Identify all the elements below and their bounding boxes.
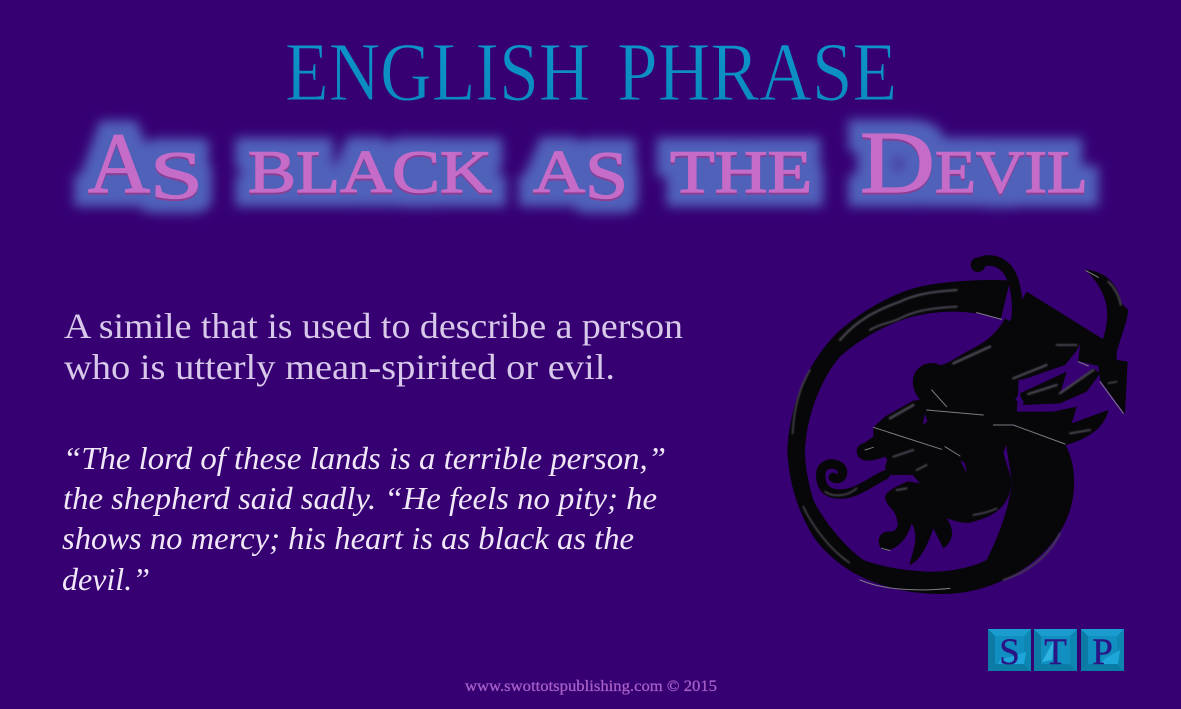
emblem wings: [993, 292, 1108, 445]
emblem highlights: [793, 282, 1121, 580]
title: English Phrase: PHRASE: [617, 26, 897, 119]
emblem whisker curl: [821, 464, 885, 494]
emblem head: [857, 318, 1018, 565]
logo: STP tiles: [988, 629, 1124, 673]
example quote: [62, 440, 666, 597]
heading: As black as the Devil: EVIL: [935, 138, 1088, 205]
emblem sharp edges: [860, 271, 1123, 590]
example quote: “The lord of these lands is a terrible person,”: [63, 440, 666, 476]
emblem ring and crescent: [787, 280, 1074, 594]
heading: As black as the Devil: [88, 113, 1088, 213]
definition text: who is utterly mean-spirited or evil.: [64, 347, 615, 387]
tile P: P: [1092, 632, 1113, 673]
emblem teeth: [885, 467, 912, 475]
heading: As black as the Devil: A: [533, 139, 585, 206]
definition text: [64, 306, 683, 387]
heading: As black as the Devil: D: [860, 113, 935, 211]
example quote: the shepherd said sadly. “He feels no pity; he: [63, 480, 657, 516]
example quote: devil.”: [62, 561, 150, 597]
heading: As black as the Devil: S: [150, 137, 203, 213]
emblem mouth gap: [893, 395, 1025, 483]
definition text: A simile that is used to describe a person: [64, 306, 683, 346]
tile S: S: [999, 632, 1020, 673]
footer: website and copyright: www.swottotspublishing.com © 2015: [465, 678, 717, 695]
heading: As black as the Devil: A: [88, 115, 150, 211]
example quote: shows no mercy; his heart is as black as the: [62, 520, 634, 556]
title: English Phrase: [285, 26, 897, 119]
heading: As black as the Devil: THE: [670, 139, 812, 205]
title: English Phrase: ENGLISH: [285, 26, 590, 118]
icon: devil emblem: [787, 257, 1128, 594]
emblem horn left: [971, 257, 1017, 353]
heading: As black as the Devil: S: [585, 137, 628, 213]
emblem horn right: [1078, 269, 1128, 414]
tile T: T: [1044, 632, 1067, 673]
heading: As black as the Devil: BLACK: [248, 139, 492, 206]
